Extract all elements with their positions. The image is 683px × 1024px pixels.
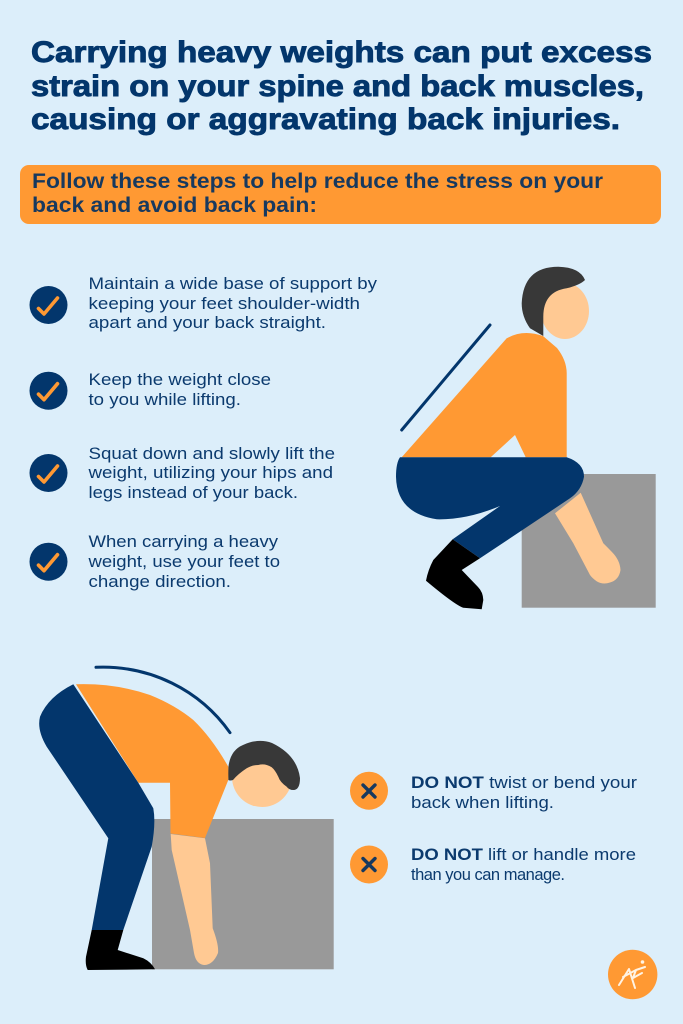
warning 2: than you can manage. (411, 866, 565, 884)
panel: orange steps banner (20, 165, 661, 224)
weight box (152, 819, 334, 969)
warning 2: DO NOT lift or handle more (411, 846, 636, 864)
step 1: keeping your feet shoulder-width (88, 295, 360, 313)
panel: do steps list (30, 275, 378, 591)
title: Carrying heavy weights can put excess (31, 36, 652, 69)
curved back line (96, 667, 230, 733)
panel: do not list (350, 772, 638, 884)
panel: orange steps banner: Follow these steps to help reduce the stress on your (32, 170, 603, 193)
shoe (426, 539, 483, 609)
step 2 (30, 371, 271, 410)
face (232, 747, 292, 807)
step 1: apart and your back straight. (88, 314, 326, 332)
title (31, 36, 652, 136)
trousers (39, 684, 154, 930)
step 3: legs instead of your back. (88, 484, 298, 502)
illustration: correct squat lift (396, 267, 656, 609)
step 2: to you while lifting. (88, 391, 241, 409)
arm (555, 493, 620, 584)
title: causing or aggravating back injuries. (31, 103, 620, 136)
step 3: weight, utilizing your hips and (87, 464, 333, 482)
hair (522, 267, 585, 336)
step 2: Keep the weight close (88, 371, 271, 389)
arm (171, 834, 218, 965)
hair (228, 741, 300, 790)
step 4: change direction. (88, 573, 231, 591)
step 4 (30, 533, 280, 591)
step 3 (30, 445, 335, 502)
shoe (86, 930, 155, 970)
step 4: When carrying a heavy (88, 533, 279, 551)
panel: orange steps banner: back and avoid back pain: (32, 194, 317, 217)
step 3: Squat down and slowly lift the (88, 445, 335, 463)
face (541, 283, 589, 339)
weight box (522, 474, 656, 608)
shirt (76, 684, 228, 838)
trousers (396, 457, 584, 558)
straight back line (402, 325, 490, 430)
title: strain on your spine and back muscles, (31, 70, 644, 103)
warning 2 (350, 846, 636, 884)
icon: logo badge (608, 950, 657, 999)
warning 1: back when lifting. (411, 794, 554, 812)
step 4: weight, use your feet to (87, 553, 280, 571)
step 1: Maintain a wide base of support by (88, 275, 378, 293)
illustration: incorrect bent lift (39, 667, 334, 970)
step 1 (30, 275, 378, 332)
warning 1 (350, 772, 638, 812)
shirt (402, 333, 567, 457)
warning 1: DO NOT twist or bend your (411, 774, 638, 792)
